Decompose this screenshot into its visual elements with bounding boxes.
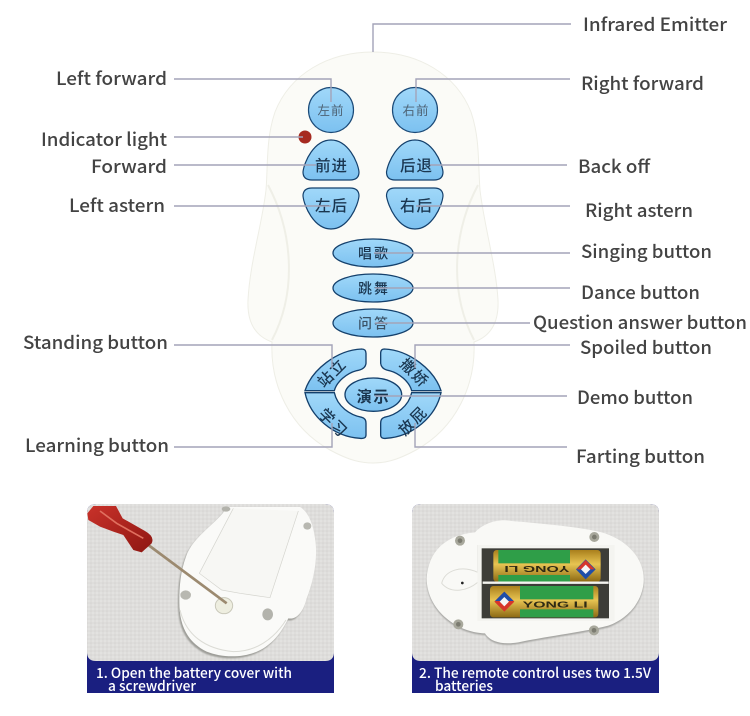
button: spoiled: 撒娇 <box>395 353 434 392</box>
button: farting: 放屁 <box>393 401 432 440</box>
label: Question answer button: Question answer button <box>533 309 747 335</box>
button: singing <box>333 239 413 267</box>
bottom button cluster <box>305 349 441 442</box>
label: Dance button: Dance button <box>581 279 700 305</box>
caption: step 2: 2. The remote control uses two 1.5V <box>419 663 652 683</box>
caption: step 1 <box>96 663 292 696</box>
button: question answer <box>333 309 413 337</box>
caption: step 1: 1. Open the battery cover with <box>96 663 292 683</box>
label: Back off: Back off <box>578 153 651 179</box>
button: back off: 后退 <box>400 154 433 176</box>
label: Standing button: Standing button <box>23 329 168 355</box>
label: Forward: Forward <box>91 153 167 179</box>
button: demo: 演示 <box>357 385 390 407</box>
label: Singing button: Singing button <box>581 238 712 264</box>
indicator light <box>298 130 312 144</box>
button: right astern <box>386 188 443 229</box>
button: left astern <box>303 188 359 229</box>
button: right astern: 右后 <box>400 194 433 216</box>
photo: batteries: YONG LI <box>523 599 588 609</box>
photo: remote back with screwdriver <box>87 506 316 658</box>
photo: remote back with open compartment <box>427 520 644 645</box>
button: left forward <box>308 88 354 132</box>
label: Infrared Emitter: Infrared Emitter <box>583 11 728 37</box>
button: left forward: 左前 <box>317 100 345 119</box>
remote control body <box>248 52 498 463</box>
label: Right astern: Right astern <box>585 197 693 223</box>
panel: step 2 batteries <box>412 504 659 696</box>
label: Spoiled button: Spoiled button <box>580 334 712 360</box>
caption: step 2: batteries <box>435 676 493 696</box>
button: dance: 跳舞 <box>358 278 390 298</box>
label: Left astern: Left astern <box>69 192 165 218</box>
button: dance <box>333 274 413 302</box>
label: Right forward: Right forward <box>581 70 704 96</box>
button: right forward <box>392 88 438 132</box>
leader lines <box>174 24 571 447</box>
button: back off <box>386 140 443 180</box>
button: question answer: 问答 <box>358 314 390 334</box>
button: left astern: 左后 <box>315 194 348 216</box>
photo: batteries <box>477 545 615 621</box>
label: Left forward: Left forward <box>56 65 167 91</box>
button: right forward: 右前 <box>402 100 430 119</box>
label: Demo button: Demo button <box>577 384 693 410</box>
button: standing: 站立 <box>312 353 351 392</box>
label: Learning button: Learning button <box>25 432 169 458</box>
button: forward <box>303 140 359 180</box>
button: forward: 前进 <box>315 154 348 176</box>
photo: batteries: YONG LI <box>504 564 569 574</box>
button: learning: 学习 <box>314 403 353 442</box>
caption: step 1: a screwdriver <box>108 676 196 696</box>
label: Farting button: Farting button <box>576 443 705 469</box>
button: singing: 唱歌 <box>358 244 390 264</box>
panel: step 1 open battery cover <box>87 504 334 696</box>
label: Indicator light: Indicator light <box>41 126 167 152</box>
caption: step 2 <box>419 663 652 696</box>
